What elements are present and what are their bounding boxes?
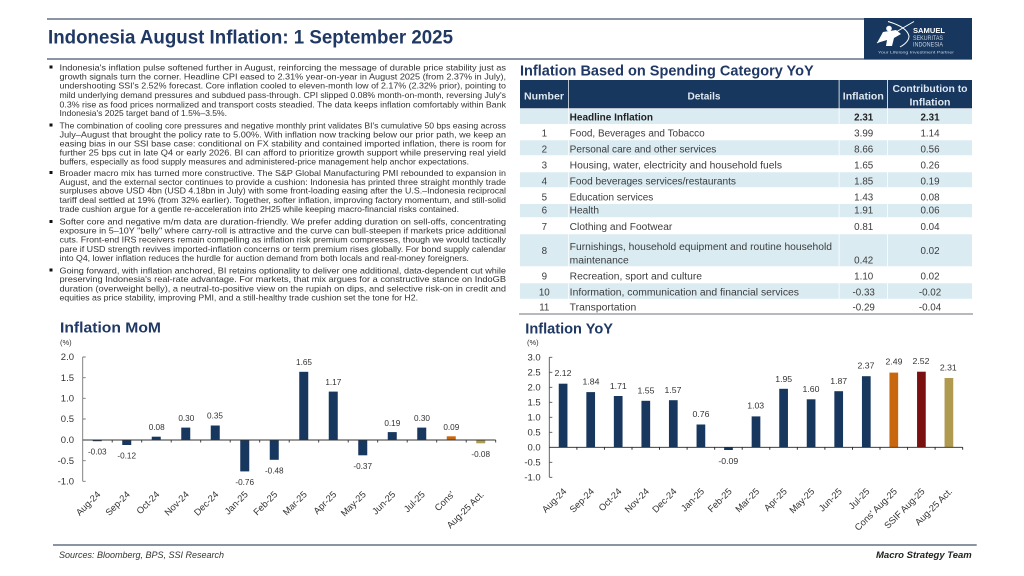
table rows text: 4 (542, 176, 548, 187)
table rows text: 3 (542, 160, 548, 171)
table rows text: 5 (542, 192, 548, 203)
MoM value labels: -0.76 (235, 478, 254, 487)
bullet 1: Indonesia's 2025 target band of 1.5%–3.5%. (60, 108, 227, 118)
bullet 5: duration (overweight belly), a neutral-to-positive view on the rupiah on dips, and selective risk-on in credit and (60, 284, 506, 294)
table rows text: Recreation, sport and culture (570, 271, 703, 282)
MoM y axis labels: 0.0 (61, 435, 74, 446)
table rows text: 0.04 (920, 222, 940, 233)
bullet 1 (50, 63, 507, 118)
YoY category labels: Jun-25 (817, 486, 844, 514)
table rows text: Headline Inflation (570, 112, 653, 123)
table rows text: 6 (542, 206, 548, 217)
YoY value labels (555, 356, 957, 466)
YoY value labels: 1.57 (665, 385, 682, 395)
table rows text: 0.26 (920, 160, 940, 171)
table shaded rows (520, 109, 972, 299)
YoY value labels: 1.71 (610, 381, 627, 391)
YoY category labels: Oct-24 (597, 486, 624, 513)
chart: inflation MoM bar chart (58, 338, 496, 530)
MoM y axis labels: 0.5 (61, 414, 74, 425)
heading: spending category: Inflation Based on Spending Category YoY (520, 62, 814, 79)
YoY y axis labels: 2.0 (527, 382, 541, 394)
commentary panel (50, 63, 507, 303)
YoY y axis labels: -1.0 (524, 472, 541, 484)
heading: inflation MoM: Inflation MoM (60, 319, 161, 336)
table rows text: 1.85 (854, 176, 874, 187)
MoM category labels (74, 489, 486, 530)
table rows text: 8.66 (854, 144, 874, 155)
YoY category labels: Cons' Aug-25 (853, 486, 899, 533)
YoY value labels: 2.31 (940, 362, 957, 372)
table rows text: -0.02 (919, 287, 941, 298)
bullet 1: mild underlying demand pressures and subdued pass-through. CPI slipped 0.08% month-on-month, reversing July's (60, 90, 506, 100)
table rows text: 0.19 (920, 176, 940, 187)
bullet 3 (50, 168, 506, 214)
YoY category labels: Nov-24 (623, 486, 651, 515)
table header: Inflation (843, 91, 884, 102)
bullet 3: August, and the external sector continues to provide a cushion: Indonesia has printed three straight monthly trade (60, 177, 506, 187)
bullet 4: cuts. Front-end IRS receivers remain compelling as inflation risk premium compresses, though we would tactically (60, 235, 507, 245)
table rows text: 1.14 (920, 128, 940, 139)
footer: team: Macro Strategy Team (876, 550, 972, 560)
YoY value labels: 0.76 (693, 409, 710, 419)
YoY category labels (540, 486, 954, 533)
MoM value labels: -0.03 (88, 448, 107, 456)
MoM value labels: 0.08 (149, 423, 165, 432)
table: inflation by spending category (519, 80, 973, 314)
MoM category labels: May-25 (339, 489, 368, 518)
YoY y axis labels (524, 352, 541, 484)
MoM category labels: Jul-25 (402, 489, 427, 514)
YoY category labels: Dec-24 (650, 486, 679, 515)
MoM value labels: -0.12 (117, 452, 136, 460)
table rows text: 1.65 (854, 160, 874, 171)
table rows text: Transportation (570, 303, 636, 314)
bullet 4 (50, 216, 507, 263)
YoY category labels: Mar-25 (733, 486, 761, 514)
YoY category labels: Feb-25 (706, 486, 734, 514)
YoY value labels: 2.49 (886, 357, 903, 367)
MoM y axis labels: 2.0 (61, 352, 74, 363)
MoM value labels: 0.19 (384, 419, 401, 428)
MoM category labels: Aug-24 (74, 489, 102, 518)
YoY y axis labels: 1.0 (527, 412, 541, 424)
bullet 1: Indonesia's inflation pulse softened further in August, reinforcing the message of durable price stability just as (60, 63, 506, 73)
table rows text: Food, Beverages and Tobacco (570, 128, 705, 139)
MoM value labels: -0.48 (265, 467, 284, 476)
table rows text: 0.06 (920, 206, 940, 217)
MoM category labels: Sep-24 (104, 489, 132, 518)
table rows text: 2.31 (854, 112, 874, 123)
YoY category labels: Sep-24 (568, 486, 596, 515)
chart: inflation YoY bar chart: (%) (527, 338, 539, 347)
bullet 4: pare if USD strength revives imported-inflation concerns or term premium rises globally. For bond supply calendar (60, 244, 506, 254)
bullet 5: preserving Indonesia's real-rate advantage. For markets, that mix argues for a constructive stance on IndoGB (60, 274, 506, 284)
MoM category labels: Nov-24 (163, 489, 191, 518)
bullet 4: into Q4, lower inflation reduces the hurdle for auction demand from both locals and real-money foreigners. (60, 253, 469, 263)
table rows text: 8 (542, 246, 548, 257)
footer: sources: Sources: Bloomberg, BPS, SSI Research (59, 550, 224, 560)
table rows text: 0.02 (920, 246, 940, 257)
logo wordmark: SAMUEL (913, 26, 945, 35)
MoM value labels: -0.08 (471, 450, 490, 459)
table rows text: Personal care and other services (570, 144, 716, 155)
YoY value labels: 1.87 (830, 376, 847, 386)
YoY value labels: 2.37 (858, 361, 875, 371)
YoY category labels: Apr-25 (762, 486, 789, 513)
table rows text: 0.08 (920, 192, 940, 203)
logo wordmark (878, 26, 955, 54)
YoY value labels: 1.60 (803, 384, 820, 394)
table rows text (539, 112, 942, 314)
MoM value labels: 0.35 (207, 412, 223, 421)
title: Indonesia August Inflation: 1 September 2025 (48, 28, 453, 48)
table rows text: Education services (570, 192, 653, 203)
table rows text: 10 (539, 287, 550, 298)
YoY value labels: -0.09 (718, 456, 738, 466)
MoM bars (93, 372, 485, 471)
chart: inflation YoY bar chart (524, 338, 963, 533)
YoY category labels: SSIF Aug-25 (882, 486, 927, 531)
table rows text: 0.42 (854, 256, 873, 267)
bullet 5 (50, 265, 506, 303)
YoY y axis labels: -0.5 (524, 458, 541, 468)
bullet 4: exposure in 5–10Y "belly" where carry-roll is attractive and the curve can bull-steepen if markets price additional (60, 225, 506, 235)
logo: Samuel Sekuritas Indonesia (864, 18, 972, 60)
MoM y axis labels: 1.0 (61, 394, 74, 404)
table rows text: 1.43 (854, 192, 874, 203)
YoY y axis labels: 2.5 (527, 368, 541, 378)
MoM y axis labels: -1.0 (58, 476, 74, 488)
MoM value labels: 0.30 (414, 414, 430, 423)
MoM category labels: Aug-25 Act. (445, 489, 486, 530)
bullet 2: buffers, especially as food supply measures and administered-price management help anchor expectations. (60, 157, 469, 167)
table rows text: Health (570, 206, 599, 217)
MoM y axis labels: -0.5 (58, 456, 74, 467)
table rows text: -0.04 (919, 303, 942, 314)
bullet 2: further 25 bps cut in late Q4 or early 2026. BI can afford to prioritize growth support while preserving real yield (60, 148, 506, 158)
bullet 2: The combination of cooling core pressures and negative monthly print validates BI's cumulative 50 bps easing across (60, 121, 506, 131)
bullet 3: Broader macro mix has turned more constructive. The S&P Global Manufacturing PMI rebounded to expansion in (60, 168, 506, 178)
YoY value labels: 1.55 (638, 386, 655, 396)
bullet 3: tariff deal settled at 19% (from 32% earlier). Together, softer inflation, improving factory momentum, and still-solid (60, 195, 506, 205)
YoY value labels: 2.52 (913, 356, 930, 366)
table rows text: 0.81 (854, 222, 873, 233)
table rows text: -0.33 (853, 287, 875, 298)
MoM y axis labels (58, 352, 74, 488)
YoY category labels: May-25 (787, 486, 816, 515)
table rows text: 11 (539, 303, 549, 314)
table header: Contribution to (892, 84, 968, 95)
MoM y axis labels: 1.5 (61, 373, 74, 384)
table header: Inflation (910, 97, 950, 108)
YoY category labels: Jul-25 (847, 486, 872, 511)
table rows text: 1.10 (854, 271, 874, 282)
bullet 3: trade cushion argue for a gentle re-acceleration into 2H25 while keeping macro-financial risks contained. (60, 204, 459, 214)
YoY bars (559, 372, 953, 450)
YoY value labels: 1.03 (747, 401, 764, 411)
table rows text: 0.02 (920, 271, 940, 282)
table rows text: 3.99 (854, 128, 873, 139)
bullet 1: 0.3% rise as food prices normalized and transport costs steadied. The data keeps inflation comfortably within Bank (60, 99, 507, 109)
bullet 4: Softer core and negative m/m data are duration-friendly. We prefer adding duration on sell-offs, concentrating (60, 216, 506, 226)
table rows text: 7 (542, 222, 547, 233)
MoM category labels: Oct-24 (135, 489, 161, 516)
chart: inflation MoM bar chart: (%) (60, 338, 72, 347)
YoY value labels: 1.95 (775, 374, 792, 384)
MoM category labels: Apr-25 (312, 489, 338, 516)
bullet 2: July–August that brought the policy rate to 5.00%. With inflation now tracking below our prior path, we keep an (60, 129, 506, 139)
logo wordmark: Your Lifelong Investment Partner (878, 50, 955, 54)
MoM value labels: 0.09 (443, 423, 460, 432)
table rows text: Information, communication and financial services (570, 287, 799, 298)
table rows text: -0.29 (853, 303, 875, 314)
table rows text: 2.31 (920, 112, 940, 123)
MoM value labels (88, 358, 490, 487)
table header: Details (688, 91, 721, 102)
table rows text: Housing, water, electricity and household fuels (570, 160, 782, 171)
MoM value labels: -0.37 (353, 462, 372, 471)
MoM category labels: Cons' (433, 489, 457, 513)
MoM value labels: 0.30 (178, 414, 195, 423)
heading: inflation YoY: Inflation YoY (525, 320, 613, 337)
bullet 2: easing bias in our SSI base case: conditional on FX stability and contained imported inflation, there is room for (60, 139, 506, 149)
table rows text: 1.91 (854, 206, 873, 217)
YoY category labels: Jan-25 (679, 486, 706, 514)
MoM category labels: Dec-24 (192, 489, 220, 518)
logo wordmark: SEKURITAS (913, 35, 943, 42)
table rows text: Food beverages services/restaurants (570, 176, 736, 187)
MoM category labels: Jun-25 (370, 489, 397, 517)
table header (520, 80, 972, 108)
YoY y axis labels: 1.5 (527, 398, 541, 408)
bullet 1: undershooting SSI's 2.52% forecast. Core inflation cooled to eleven-month low of 2.17% (2.32% prior), pointing to (60, 81, 506, 91)
YoY y axis labels: 0.0 (527, 442, 541, 454)
table rows text: maintenance (570, 256, 629, 267)
logo wordmark: INDONESIA (913, 41, 944, 48)
table rows text: Furnishings, household equipment and routine household (570, 242, 832, 253)
MoM value labels: 1.65 (296, 358, 312, 367)
YoY value labels: 1.84 (583, 377, 600, 387)
icon: archer (877, 22, 914, 47)
bullet 2 (50, 121, 506, 167)
bullet 1: growth signals turn the corner. Headline CPI eased to 2.31% year-on-year in August 2025 (from 2.37% in July), (60, 72, 506, 82)
MoM value labels: 1.17 (325, 378, 342, 387)
bullet 5: Going forward, with inflation anchored, BI retains optionality to deliver one additional, data-dependent cut while (60, 265, 506, 275)
bullet 3: surpluses above USD 4bn (USD 4.18bn in July) with some front-loading easing after the U.S.–Indonesia reciprocal (60, 186, 506, 196)
YoY y axis labels: 3.0 (527, 352, 541, 364)
table rows text: 1 (542, 128, 547, 139)
YoY category labels: Aug-24 (540, 486, 568, 515)
MoM category labels: Jan-25 (223, 489, 250, 517)
table header: Number (524, 91, 564, 102)
bullet 5: equities as price stability, improving PMI, and a still-healthy trade cushion set the tone for H2. (60, 293, 418, 303)
table rows text: 0.56 (920, 144, 940, 155)
YoY y axis labels: 0.5 (527, 428, 541, 438)
table rows text: 9 (542, 271, 547, 282)
YoY value labels: 2.12 (555, 368, 572, 378)
YoY category labels: Aug-25 Act. (913, 486, 954, 527)
MoM category labels: Mar-25 (281, 489, 309, 517)
MoM category labels: Feb-25 (252, 489, 279, 517)
table rows text: 2 (542, 144, 547, 155)
table rows text: Clothing and Footwear (570, 222, 673, 233)
